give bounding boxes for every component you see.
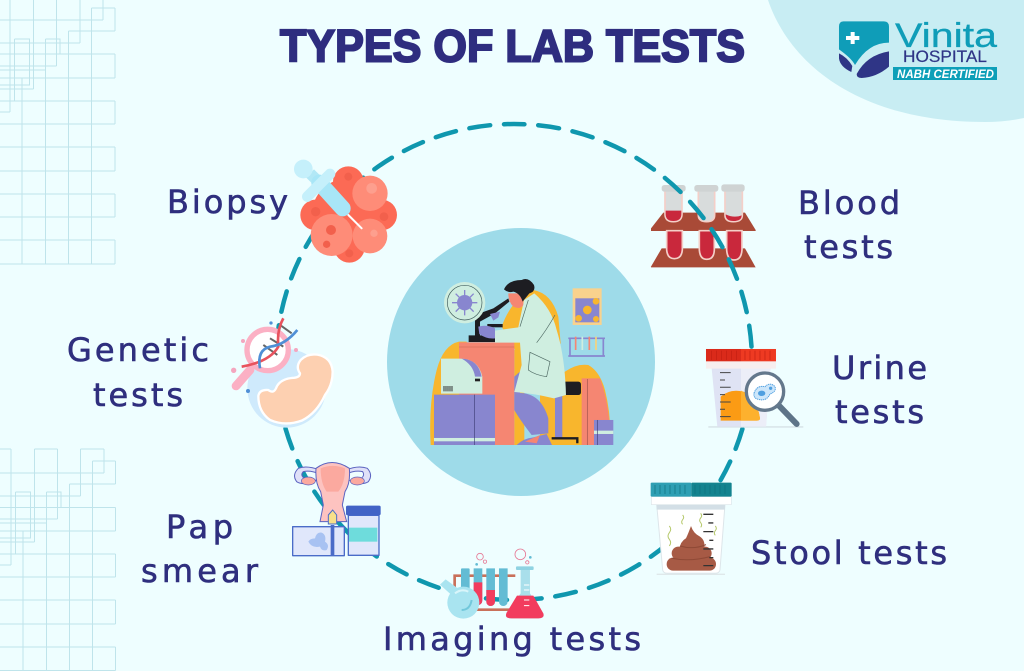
label: Pap smear: Pap <box>166 508 233 546</box>
scientist at microscope illustration <box>430 279 613 445</box>
icon: biopsy cells and syringe <box>294 160 397 263</box>
logo badge: NABH CERTIFIED <box>897 69 994 81</box>
icon: pap smear uterus, slide and jar <box>293 462 381 556</box>
title: TYPES OF LAB TESTS <box>280 20 745 72</box>
label: Genetic tests <box>67 331 209 414</box>
background grid pattern: bottom left <box>0 449 116 670</box>
background grid pattern: top left <box>0 0 115 264</box>
icon: stool sample cup <box>651 483 732 574</box>
label: Pap smear <box>141 508 259 590</box>
label: Pap smear: smear <box>141 552 259 590</box>
top right corner shape <box>768 0 1024 122</box>
label: Urine tests: Urine <box>832 349 927 387</box>
label: Genetic tests: Genetic <box>67 331 209 369</box>
logo shield icon <box>839 21 889 78</box>
label: Urine tests: tests <box>835 393 924 431</box>
logo <box>839 17 997 81</box>
icon: urine cup and magnifier <box>706 349 803 427</box>
label: Blood tests: tests <box>804 228 893 266</box>
icon: genetic tests embryo and DNA magnifier <box>231 318 333 428</box>
icon: lab glassware for imaging tests <box>440 549 544 619</box>
logo subtitle: HOSPITAL <box>903 47 987 66</box>
icon: blood tests rack <box>651 184 756 267</box>
center illustration circle <box>387 228 655 496</box>
label: Stool tests: Stool tests <box>751 534 947 572</box>
label: Blood tests: Blood <box>798 184 900 222</box>
label: Blood tests <box>798 184 900 266</box>
label: Genetic tests: tests <box>93 376 183 414</box>
label: Imaging tests: Imaging tests <box>383 620 641 658</box>
label: Biopsy: Biopsy <box>167 183 288 221</box>
logo name: Vinita <box>895 17 997 55</box>
label: Urine tests <box>832 349 927 431</box>
icon: dashed ring <box>276 124 752 600</box>
